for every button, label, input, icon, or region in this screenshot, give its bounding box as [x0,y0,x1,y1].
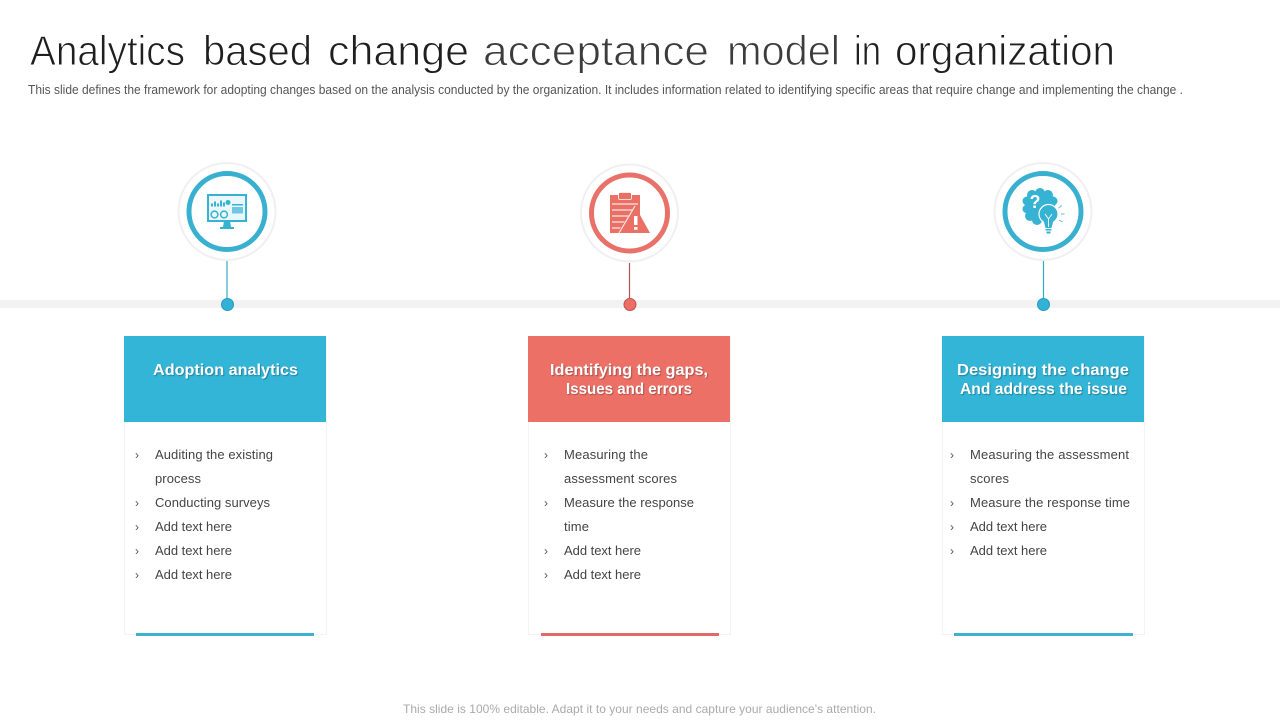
panel header: Designing the change [957,362,1129,379]
bullet list: Add text here [970,543,1047,558]
bullet list: Conducting surveys [155,495,270,510]
bullet list: scores [970,471,1010,486]
panel header: And address the issue [960,381,1127,398]
bullet list: › [135,448,139,462]
panel header: Identifying the gaps, [550,362,708,379]
bullet list [544,447,694,582]
panel header [124,336,326,422]
title: acceptance [483,27,709,74]
footer note: This slide is 100% editable. Adapt it to your needs and capture your audience's attention. [403,702,876,716]
bullet list: Add text here [155,519,232,534]
title: organization [895,27,1115,74]
bullet list: › [544,496,548,510]
bullet list: process [155,471,202,486]
title: change [328,27,469,74]
bullet list [950,447,1130,558]
icon: analytics monitor [208,195,246,229]
bullet list: › [544,544,548,558]
title: based [203,27,312,74]
panel: identifying the gaps [528,336,730,636]
panel header: Adoption analytics [153,362,298,379]
title: model [727,27,840,74]
bullet list: Measure the response time [970,495,1130,510]
bullet list: › [135,544,139,558]
node: identifying the gaps [581,164,678,310]
bullet list: Add text here [155,567,232,582]
bullet list: Add text here [970,519,1047,534]
panel header: Issues and errors [566,381,692,398]
bullet list [135,447,273,582]
bullet list: › [544,568,548,582]
panel: adoption analytics [124,336,326,636]
timeline bar [0,300,1280,308]
panel header [942,336,1144,422]
title: Analytics [30,27,185,74]
icon: clipboard warning [610,192,650,233]
title [30,27,1115,74]
bullet list: Measuring the assessment [970,447,1129,462]
bullet list: › [950,544,954,558]
bullet list: › [135,496,139,510]
bullet list: Add text here [155,543,232,558]
panel header [528,336,730,422]
bullet list: assessment scores [564,471,678,486]
bullet list: › [950,520,954,534]
bullet list: Auditing the existing [155,447,273,462]
bullet list: Add text here [564,543,641,558]
subtitle: This slide defines the framework for adopting changes based on the analysis conducted by the organization. It includes information related to identifying specific areas that require change and implementing the change . [28,83,1183,97]
icon: brain and light bulb [1022,188,1064,234]
bullet list: › [950,448,954,462]
bullet list: Measure the response [564,495,694,510]
node: designing the change [994,163,1092,310]
node: adoption analytics [178,163,276,310]
bullet list: › [135,520,139,534]
bullet list: › [544,448,548,462]
bullet list: time [564,519,589,534]
bullet list: Add text here [564,567,641,582]
panel: designing the change [942,336,1144,636]
bullet list: › [135,568,139,582]
icon: brain and light bulb: ? [1030,192,1040,212]
bullet list: Measuring the [564,447,648,462]
bullet list: › [950,496,954,510]
title: in [854,27,881,74]
